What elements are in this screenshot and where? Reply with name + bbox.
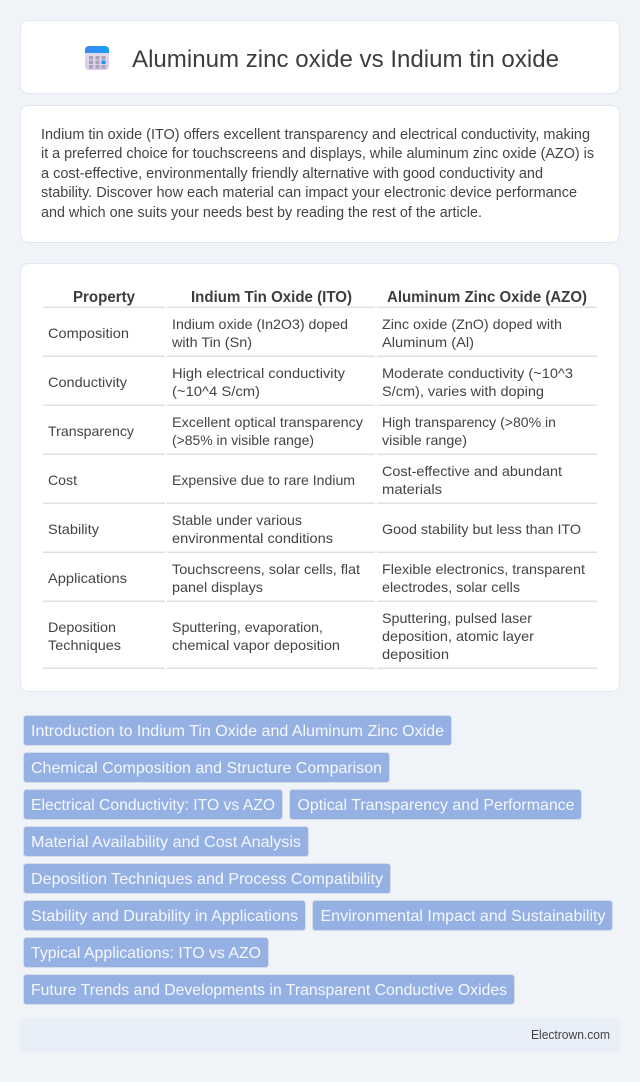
tag: electrical conductivity — [24, 790, 282, 820]
row: composition: Zinc oxide (ZnO) doped with — [382, 316, 562, 332]
tag: future trends: Future Trends and Developments in Transparent Conductive Oxides — [31, 982, 507, 999]
row: deposition techniques: deposition, atomic layer — [382, 628, 534, 644]
row: transparency: Transparency — [48, 423, 134, 439]
row: deposition techniques: deposition — [382, 646, 449, 662]
footer — [20, 1018, 620, 1052]
row: composition: Composition — [48, 325, 129, 341]
row: cost — [48, 463, 562, 497]
panel: introduction — [20, 106, 620, 242]
table header row: Indium Tin Oxide (ITO) — [191, 289, 352, 306]
row: transparency: visible range) — [382, 432, 467, 448]
row: applications — [48, 561, 585, 595]
tag: introduction — [24, 716, 452, 746]
panel: header — [20, 20, 620, 94]
row: composition — [48, 316, 562, 350]
tag: stability and durability: Stability and Durability in Applications — [31, 908, 298, 925]
row: applications: electrodes, solar cells — [382, 579, 520, 595]
intro text: and which one suits your needs best by reading the rest of the article. — [41, 205, 482, 221]
tag: chemical composition: Chemical Composition and Structure Comparison — [31, 760, 382, 777]
row: conductivity — [48, 365, 573, 399]
row: deposition techniques: Sputtering, pulsed laser — [382, 610, 532, 626]
row: cost: Expensive due to rare Indium — [172, 472, 355, 488]
tag: introduction: Introduction to Indium Tin Oxide and Aluminum Zinc Oxide — [31, 723, 444, 740]
row: transparency: High transparency (>80% in — [382, 414, 556, 430]
row: stability: Stability — [48, 521, 99, 537]
table header row — [73, 289, 587, 306]
row: transparency: Excellent optical transparency — [172, 414, 363, 430]
row: stability: environmental conditions — [172, 530, 333, 546]
row: cost: Cost — [48, 472, 77, 488]
row: stability: Good stability but less than ITO — [382, 521, 581, 537]
intro text — [41, 127, 594, 221]
row: composition: Indium oxide (In2O3) doped — [172, 316, 348, 332]
icon: calendar — [85, 46, 109, 70]
tag: optical transparency — [290, 790, 582, 820]
row: stability: Stable under various — [172, 512, 302, 528]
row: conductivity: (~10^4 S/cm) — [172, 383, 260, 399]
row: transparency: (>85% in visible range) — [172, 432, 314, 448]
intro text: a cost-effective, environmentally friendly alternative with good conductivity and — [41, 166, 543, 182]
tag: deposition techniques — [24, 864, 390, 894]
tag: availability and cost: Material Availability and Cost Analysis — [31, 834, 301, 851]
footer: Electrown.com — [531, 1027, 610, 1042]
intro text: stability. Discover how each material can impact your electronic device performance — [41, 185, 577, 201]
row: applications: Applications — [48, 570, 127, 586]
tag: future trends — [24, 974, 514, 1004]
row: conductivity: Moderate conductivity (~10^3 — [382, 365, 573, 381]
row: cost: Cost-effective and abundant — [382, 463, 562, 479]
section tags — [24, 716, 612, 1004]
tag: typical applications: Typical Applications: ITO vs AZO — [31, 945, 261, 962]
row: cost: materials — [382, 481, 442, 497]
row: transparency — [48, 414, 556, 448]
tag: optical transparency: Optical Transparency and Performance — [298, 797, 575, 814]
row: deposition techniques: Techniques — [48, 637, 121, 653]
tag: chemical composition — [24, 752, 390, 782]
tag: environmental impact: Environmental Impact and Sustainability — [320, 908, 606, 925]
title: Aluminum zinc oxide vs Indium tin oxide — [132, 46, 559, 73]
row: applications: Flexible electronics, transparent — [382, 561, 585, 577]
row: deposition techniques: Sputtering, evaporation, — [172, 619, 323, 635]
tag: typical applications — [24, 938, 268, 968]
table header row: Property — [73, 289, 135, 306]
row: conductivity: S/cm), varies with doping — [382, 383, 544, 399]
row: composition: Aluminum (Al) — [382, 334, 474, 350]
row: deposition techniques: chemical vapor deposition — [172, 637, 340, 653]
tag: electrical conductivity: Electrical Conductivity: ITO vs AZO — [31, 797, 275, 814]
row: applications: Touchscreens, solar cells, flat — [172, 561, 360, 577]
row: stability — [48, 512, 581, 546]
panel: comparison table — [20, 264, 620, 692]
row: conductivity: High electrical conductivity — [172, 365, 345, 381]
tag: deposition techniques: Deposition Techniques and Process Compatibility — [31, 871, 383, 888]
intro text: it a preferred choice for touchscreens and displays, while aluminum zinc oxide (AZO) is — [41, 146, 594, 162]
tag: availability and cost — [24, 826, 308, 856]
row: applications: panel displays — [172, 579, 263, 595]
table header row: Aluminum Zinc Oxide (AZO) — [387, 289, 587, 306]
row: composition: with Tin (Sn) — [171, 334, 252, 350]
intro text: Indium tin oxide (ITO) offers excellent transparency and electrical conductivity, making — [41, 127, 590, 143]
tag: stability and durability — [24, 900, 306, 930]
row: deposition techniques — [48, 610, 534, 662]
tag: environmental impact — [312, 900, 612, 930]
row: deposition techniques: Deposition — [48, 619, 116, 635]
row: conductivity: Conductivity — [48, 374, 127, 390]
